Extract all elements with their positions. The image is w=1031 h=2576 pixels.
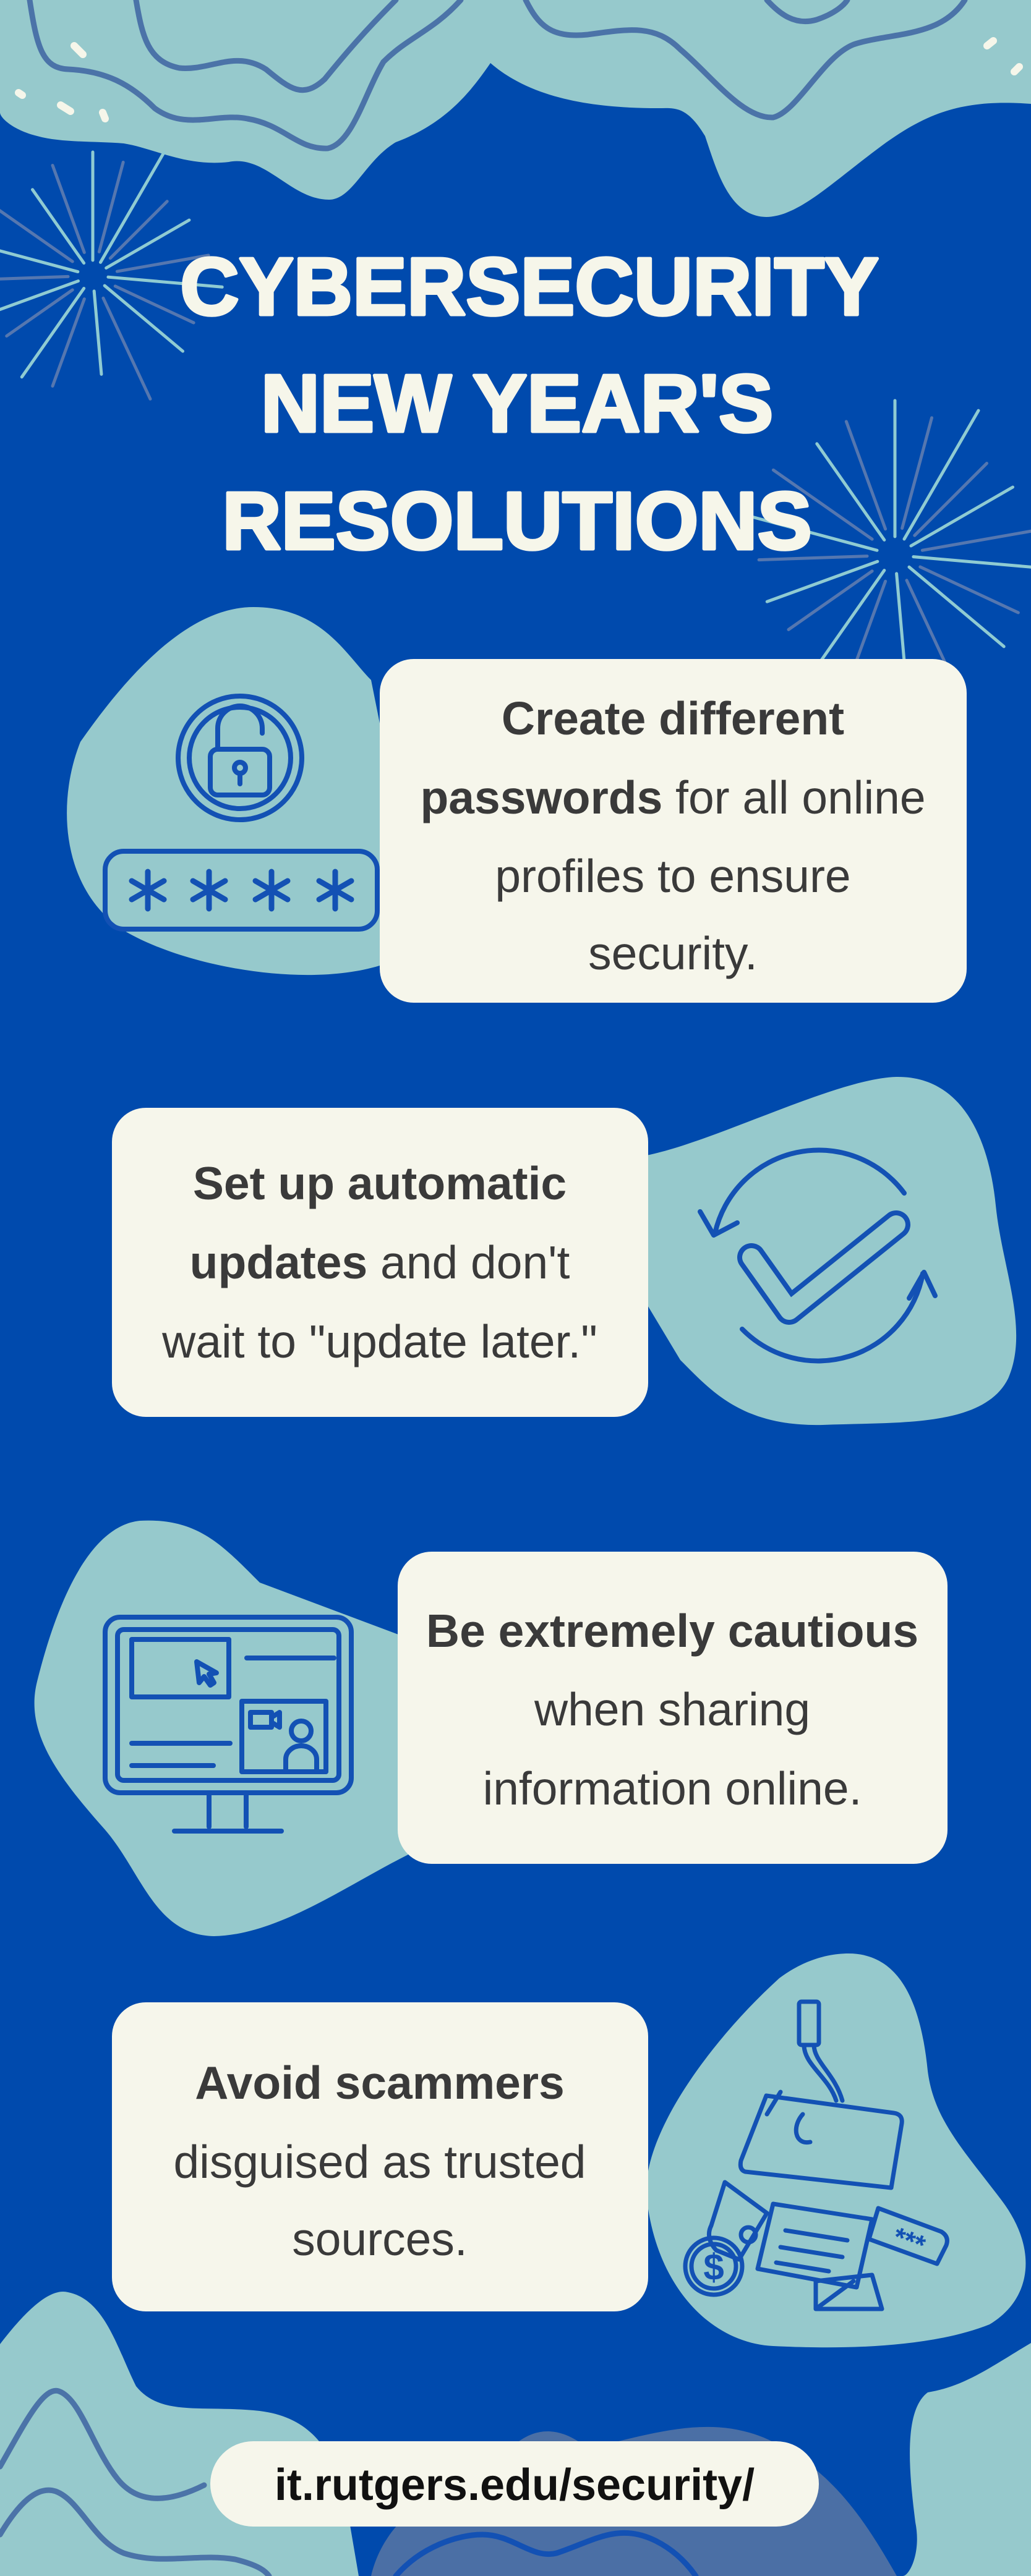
card 3 text: when sharing xyxy=(534,1683,810,1735)
card 3 text: Be extremely cautious xyxy=(426,1605,918,1657)
card 1 text xyxy=(420,692,926,979)
icon: phishing: *** xyxy=(889,2222,930,2261)
blob 1 xyxy=(67,607,396,975)
icon: lock and password xyxy=(105,696,377,929)
firework top-left xyxy=(0,152,222,399)
card 1 text: profiles to ensure xyxy=(495,850,851,902)
bottom decoration xyxy=(0,2292,1031,2576)
card 4 xyxy=(112,2002,648,2311)
card 1 text: passwords for all online xyxy=(420,772,926,823)
title: NEW YEAR'S xyxy=(261,358,773,449)
card 3 text xyxy=(426,1605,918,1814)
title: RESOLUTIONS xyxy=(222,475,812,566)
card 2 xyxy=(112,1108,648,1417)
icon: monitor xyxy=(105,1617,351,1831)
icon: refresh check xyxy=(700,1150,935,1361)
card 4 text: disguised as trusted xyxy=(173,2136,586,2188)
blob 3 xyxy=(35,1521,408,1936)
card 3 xyxy=(398,1552,948,1864)
card 1 text: security. xyxy=(588,927,758,979)
panel: passwords xyxy=(67,607,967,1003)
card 3 text: information online. xyxy=(483,1762,862,1814)
panel: sharing xyxy=(35,1521,948,1936)
card 2 text xyxy=(161,1157,597,1367)
icon: phishing: $ xyxy=(703,2247,724,2288)
blob 4 xyxy=(646,1953,1025,2347)
panel: scammers xyxy=(112,1953,1025,2347)
blob 2 xyxy=(643,1077,1016,1425)
card 2 text: updates and don't xyxy=(190,1236,570,1288)
card 1 text: Create different xyxy=(502,692,844,744)
title: CYBERSECURITY xyxy=(180,241,879,332)
top wave decoration xyxy=(0,0,1031,217)
card 4 text: Avoid scammers xyxy=(195,2057,565,2109)
card 2 text: Set up automatic xyxy=(193,1157,567,1209)
firework bottom-right xyxy=(751,401,1031,701)
title xyxy=(180,241,879,566)
url pill: it.rutgers.edu/security/ xyxy=(275,2460,755,2510)
card 1 xyxy=(380,659,967,1003)
card 4 text xyxy=(173,2057,586,2265)
card 4 text: sources. xyxy=(292,2213,468,2265)
card 2 text: wait to "update later." xyxy=(161,1316,597,1367)
icon: phishing xyxy=(685,2002,947,2309)
url pill xyxy=(210,2441,819,2527)
panel: updates xyxy=(112,1077,1016,1425)
